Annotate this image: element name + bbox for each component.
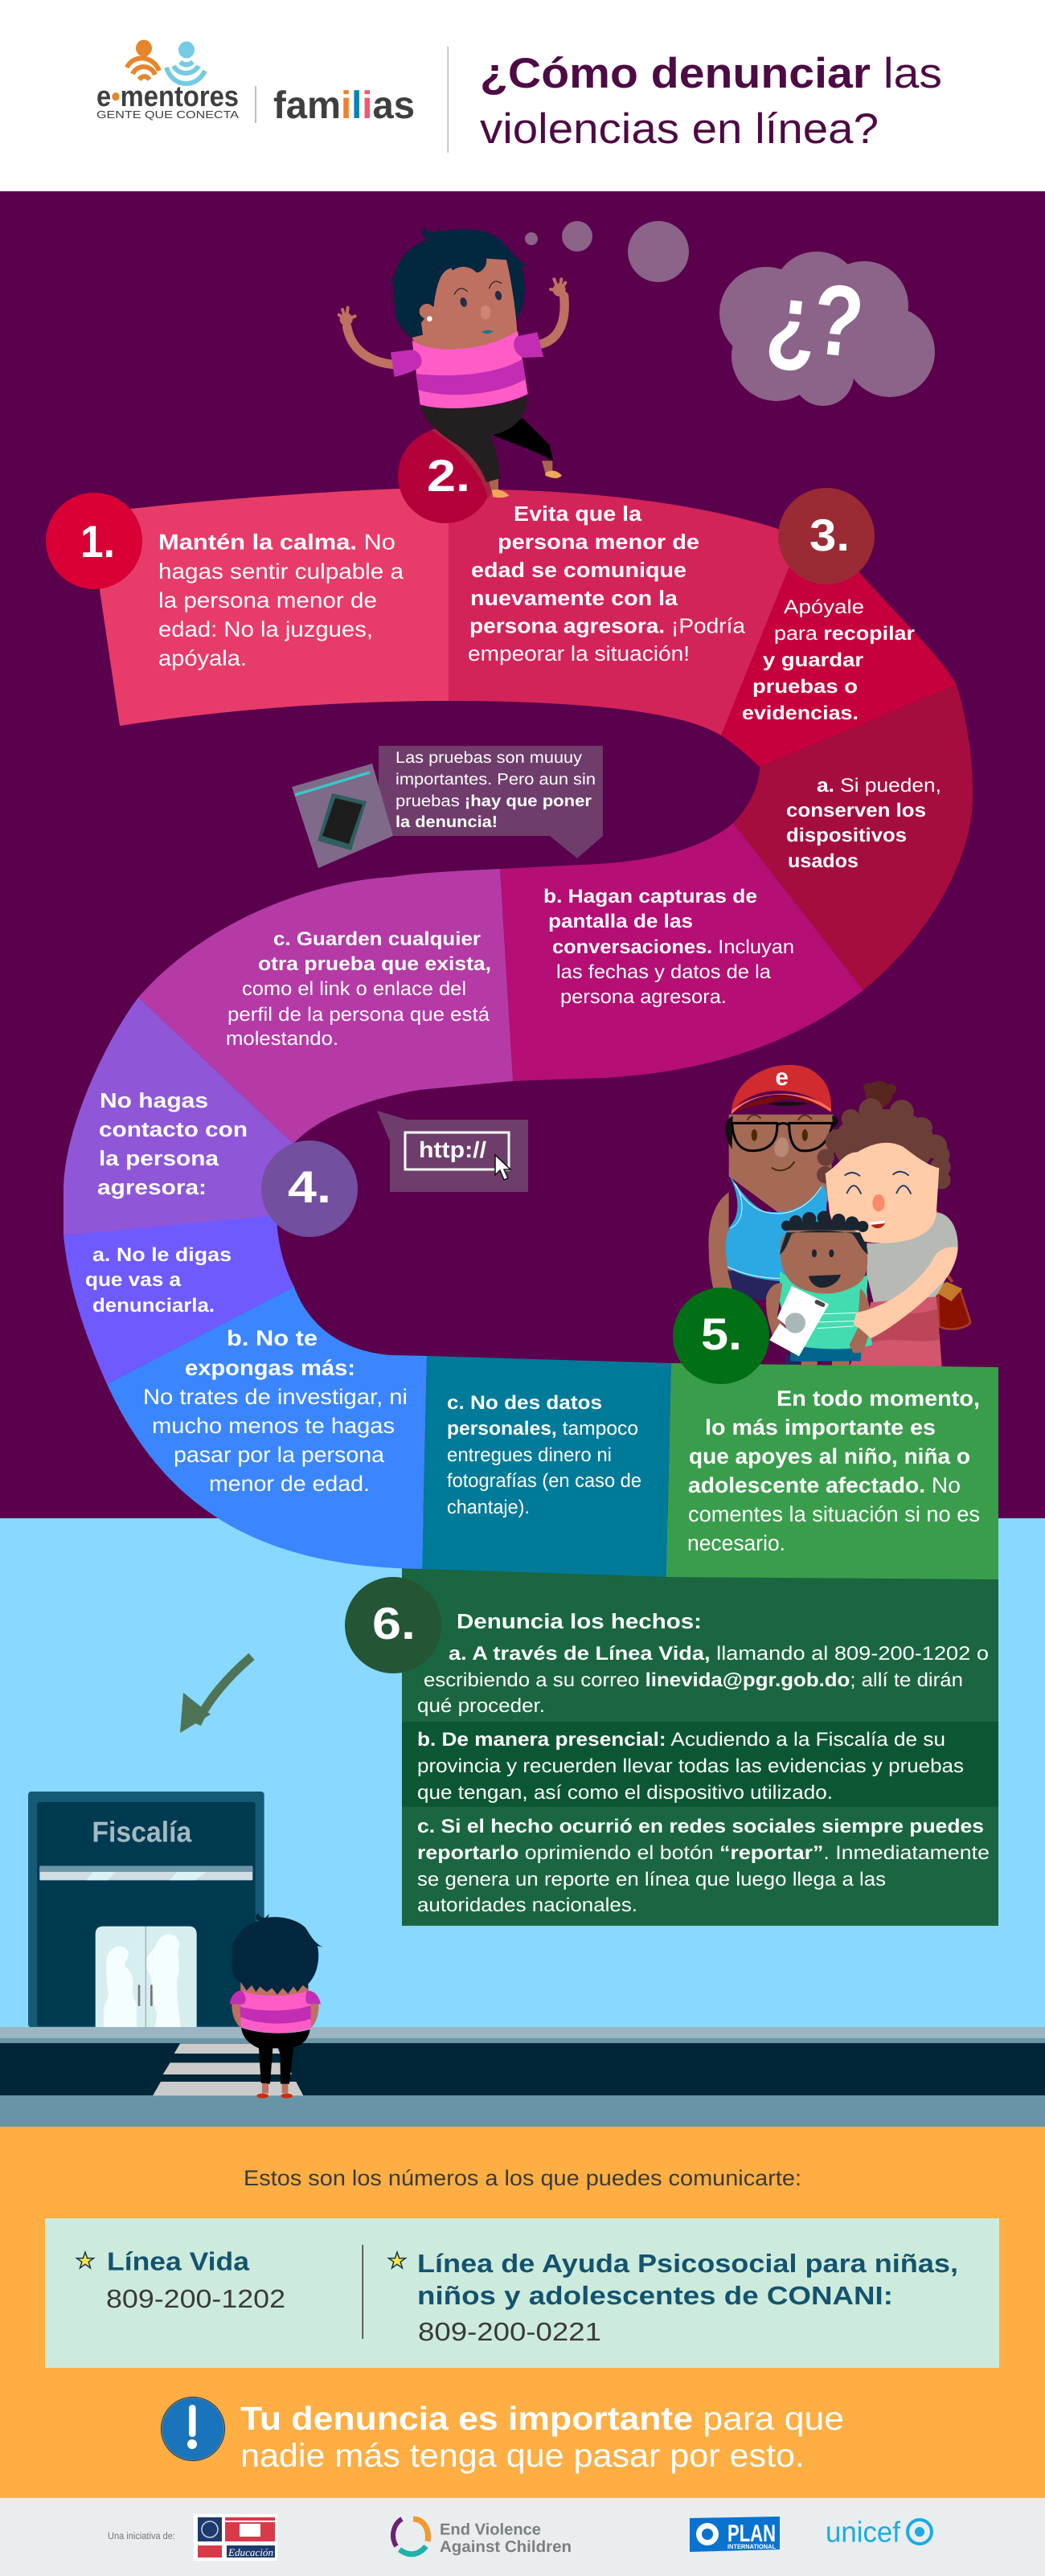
text: step 3: pruebas o [752, 676, 858, 698]
badge: 5: 5. [701, 1308, 742, 1359]
text: step 4c: personales, tampoco [447, 1418, 638, 1440]
panel: step 3 [721, 529, 957, 767]
text: step 4b: expongas más: [185, 1356, 355, 1380]
logo: end violence: End Violence [440, 2521, 541, 2538]
logo: plan: INTERNATIONAL [727, 2543, 776, 2550]
text: step 3b: conversaciones. Incluyan [552, 936, 794, 958]
text: step 3: y guardar [763, 649, 863, 671]
footer logos [0, 2498, 1045, 2576]
text: evidence [395, 749, 596, 831]
badge: 2 [398, 428, 493, 523]
text: Línea Vida: Línea Vida [107, 2247, 249, 2276]
logo: e-mentores: GENTE QUE CONECTA [96, 109, 239, 121]
text: evidence: Las pruebas son muuuy [395, 749, 582, 767]
text: step 3b: b. Hagan capturas de [543, 886, 757, 907]
text: denuncia los hechos: autoridades nacionales. [417, 1894, 637, 1916]
text: step 4: la persona [99, 1146, 219, 1170]
text: step 4c: fotografías (en caso de [447, 1470, 641, 1492]
text: step 4c: entregues dinero ni [447, 1444, 612, 1466]
logo: plan [690, 2517, 780, 2552]
text: step 1: edad: No la juzgues, [158, 617, 373, 641]
text: denuncia los hechos: que tengan, así como el dispositivo utilizado. [417, 1782, 833, 1804]
panel: step 3b screenshots [500, 823, 863, 1081]
question cloud [719, 252, 935, 406]
callout: evidence bag [292, 746, 603, 868]
text: step 2 [468, 502, 746, 666]
text: numbers intro: Estos son los números a los que puedes comunicarte: [244, 2166, 801, 2190]
text: step 5: comentes la situación si no es [688, 1502, 980, 1526]
text: step 3: Apóyale [784, 596, 864, 618]
thought bubbles [525, 221, 689, 282]
purple background [0, 191, 1045, 1518]
illustration: family: e [776, 1063, 789, 1090]
header [96, 40, 942, 153]
text: step 3a [786, 775, 941, 872]
badge: 1: 1. [80, 516, 115, 567]
callout: http link [377, 1111, 528, 1192]
text: step 4b: pasar por la persona [174, 1443, 385, 1467]
text: step 2: empeorar la situación! [468, 641, 690, 666]
text: evidence: pruebas ¡hay que poner [395, 792, 592, 810]
text: step 4a: que vas a [85, 1269, 182, 1291]
text: step 3b: pantalla de las [548, 911, 693, 932]
text: denuncia los hechos: b. De manera presencial: Acudiendo a la Fiscalía de su [417, 1729, 945, 1751]
panel: step 4a [64, 1215, 294, 1384]
icon: evidence bag [292, 764, 393, 868]
text: step 5 [687, 1386, 980, 1555]
text: step 4a: a. No le digas [92, 1244, 232, 1266]
panel: step 4 no contact [64, 997, 293, 1235]
text: step 3b: persona agresora. [560, 986, 727, 1008]
logo: unicef: unicef [826, 2516, 901, 2548]
text: step 5: necesario. [687, 1531, 785, 1555]
logo: plan: PLAN [727, 2521, 776, 2547]
text: Línea de Ayuda: niños y adolescentes de CONANI: [417, 2281, 893, 2310]
title: violencias en línea? [480, 105, 879, 153]
panel: step 2 [449, 489, 789, 735]
callout text: Tu denuncia es importante para que [240, 2400, 844, 2437]
panel: helplines [45, 2218, 999, 2368]
title: ¿Cómo denunciar las [480, 50, 942, 97]
question cloud: ? [807, 263, 869, 379]
text: step 4b: menor de edad. [209, 1472, 370, 1496]
question cloud: ¿ [762, 261, 823, 378]
text: Línea Vida [106, 2247, 285, 2313]
text: denuncia los hechos [417, 1609, 990, 1916]
panel: phone numbers band [0, 2127, 1045, 2498]
text: step 3a: a. Si pueden, [817, 775, 941, 797]
text: step 3c: c. Guarden cualquier [273, 928, 481, 950]
text: denuncia los hechos: Denuncia los hechos: [457, 1609, 702, 1633]
text: step 3: evidencias. [742, 702, 859, 724]
panel: step 1 calm [100, 489, 450, 726]
text: Línea de Ayuda: Línea de Ayuda Psicosocial para niñas, [417, 2249, 958, 2278]
text: step 3c: como el link o enlace del [242, 978, 466, 1000]
text: step 4: contacto con [99, 1117, 248, 1141]
text: denuncia los hechos: provincia y recuerden llevar todas las evidencias y pruebas [417, 1755, 964, 1777]
text: step 3c: otra prueba que exista, [258, 953, 491, 975]
illustration: worried child [339, 227, 566, 498]
callout text: nadie más tenga que pasar por esto. [240, 2437, 805, 2474]
panel: step 3a devices [733, 685, 973, 990]
icon: exclamation [161, 2397, 225, 2461]
text: denuncia los hechos: se genera un reporte en línea que luego llega a las [417, 1869, 886, 1890]
text: step 1 [158, 530, 404, 670]
panel: step 4c [422, 1356, 671, 1577]
text: step 2: Evita que la [514, 502, 642, 526]
panel: step 5 [666, 1363, 998, 1579]
logo: e-mentores [96, 40, 239, 121]
badge: 1 [46, 493, 142, 589]
text: step 4c: c. No des datos [447, 1392, 602, 1414]
panel: step 3c other evidence [138, 869, 513, 1144]
text: step 4a: denunciarla. [92, 1295, 215, 1317]
callout: http link: http:// [419, 1137, 486, 1162]
text: step 3c: molestando. [226, 1028, 338, 1050]
text: evidence: importantes. Pero aun sin [395, 771, 596, 788]
text: step 5: adolescente afectado. No [688, 1473, 961, 1497]
text: denuncia los hechos: qué proceder. [417, 1695, 545, 1717]
badge: 4 [261, 1141, 358, 1237]
logo: ministerio: Educación [227, 2546, 273, 2558]
title [480, 50, 942, 153]
text: step 5: lo más importante es [705, 1415, 936, 1440]
text: step 4c: chantaje). [447, 1497, 530, 1518]
text: step 5: En todo momento, [777, 1386, 980, 1411]
badge: 4: 4. [288, 1161, 331, 1212]
text: step 3a: dispositivos [786, 825, 907, 846]
text: Línea de Ayuda: 809-200-0221 [418, 2317, 601, 2346]
text: step 3: para recopilar [774, 623, 915, 645]
text: step 1: la persona menor de [158, 588, 377, 612]
text: step 4b: mucho menos te hagas [152, 1414, 395, 1438]
icon: star [389, 2252, 405, 2268]
text: step 4: agresora: [97, 1175, 207, 1199]
text: step 2: persona menor de [498, 530, 699, 554]
text: step 3a: usados [788, 850, 859, 872]
text: denuncia los hechos: reportarlo oprimiendo el botón “reportar” . Inmediatamente [417, 1842, 990, 1864]
text: step 4: No hagas [100, 1088, 208, 1112]
text: Línea Vida: 809-200-1202 [106, 2284, 285, 2313]
sign text: Fiscalía [92, 1816, 192, 1848]
badge: 6: 6. [372, 1598, 416, 1648]
text: step 1: Mantén la calma. No [158, 530, 395, 555]
text: initiative: Una iniciativa de: [108, 2530, 175, 2541]
text: step 4 [97, 1088, 248, 1199]
panel: step 6 denuncia [402, 1568, 998, 1926]
callout text [240, 2400, 844, 2474]
text: step 2: persona agresora. ¡Podría [469, 614, 746, 638]
text: step 4b: No trates de investigar, ni [143, 1385, 408, 1409]
text: step 3b [543, 886, 794, 1008]
badge: 3: 3. [809, 510, 850, 560]
icon: cursor [495, 1155, 510, 1180]
logo: e-mentores: e•mentores [96, 80, 239, 113]
text: denuncia los hechos: c. Si el hecho ocurrió en redes sociales siempre puedes [417, 1816, 984, 1837]
badge: 3 [778, 488, 875, 584]
icon: star [77, 2252, 93, 2268]
text: denuncia los hechos: a. A través de Línea Vida, llamando al 809-200-1202 o [449, 1643, 989, 1665]
street [0, 2027, 1045, 2128]
text: step 1: hagas sentir culpable a [158, 559, 404, 584]
sky background [0, 1518, 1045, 2027]
text: step 5: que apoyes al niño, niña o [689, 1444, 970, 1468]
badge: 5 [673, 1288, 769, 1384]
building: Fiscalía [28, 1792, 264, 2027]
text: denuncia los hechos: escribiendo a su correo linevida@pgr.gob.do ; allí te dirán [424, 1669, 963, 1691]
text: step 2: edad se comunique [471, 558, 686, 582]
illustration: child from behind [230, 1913, 323, 2099]
text: step 4b: b. No te [227, 1326, 318, 1350]
arrow [180, 1657, 252, 1733]
badge: 6 [345, 1577, 441, 1673]
logo: ministerio [194, 2514, 277, 2561]
text: step 4b [143, 1326, 408, 1496]
text: Línea de Ayuda [417, 2249, 958, 2346]
panel: step 4b [107, 1287, 427, 1569]
text: step 3c [226, 928, 491, 1050]
text: step 2: nuevamente con la [470, 586, 678, 610]
badge: 2: 2. [427, 450, 470, 501]
text: step 1: apóyala. [158, 646, 247, 670]
crosswalk [153, 2043, 303, 2095]
text: step 4a [85, 1244, 232, 1317]
logo: familias: familias [273, 84, 415, 127]
logo: end violence [393, 2519, 572, 2556]
text: evidence: la denuncia! [395, 813, 498, 831]
logo: end violence: Against Children [440, 2538, 572, 2556]
text: step 3b: las fechas y datos de la [556, 961, 772, 983]
text: step 3c: perfil de la persona que está [227, 1004, 490, 1026]
text: step 4c [447, 1392, 641, 1518]
illustration: family [708, 1063, 970, 1366]
text: step 3a: conserven los [786, 800, 926, 821]
text: step 3 [742, 596, 915, 724]
